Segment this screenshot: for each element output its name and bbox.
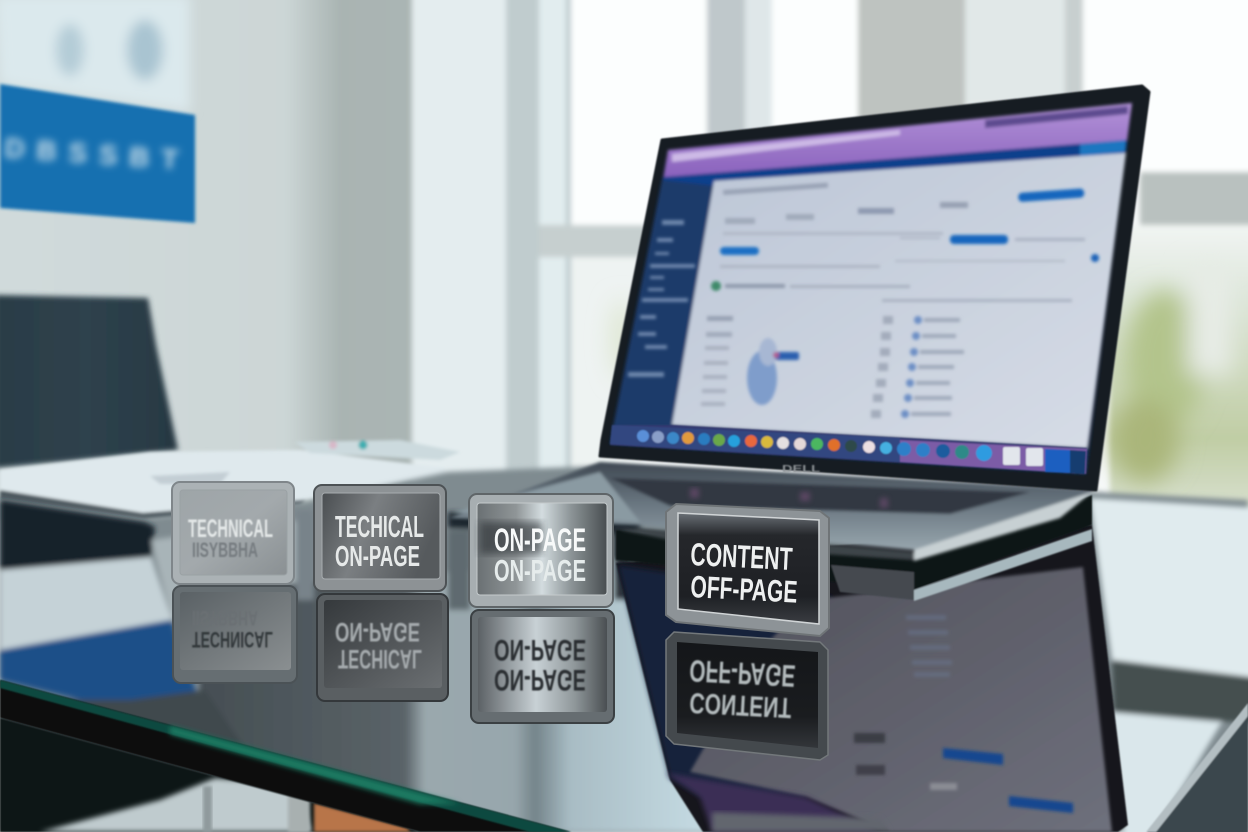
glass table	[0, 466, 1248, 832]
chart blob	[701, 316, 799, 406]
tile reflection: off-page: OFF-PAGE	[689, 653, 796, 694]
reflected blue pills	[854, 615, 1073, 813]
tile: technical: IISYBBHA	[192, 539, 258, 562]
laptop screen	[610, 103, 1132, 474]
tile: technical on-page	[314, 485, 446, 591]
tile: content off-page: CONTENT	[690, 536, 794, 577]
tile: content off-page: OFF-PAGE	[690, 569, 798, 610]
tile: technical	[172, 482, 294, 584]
laptop lid	[600, 86, 1149, 490]
keyboard colour reflections	[690, 488, 888, 508]
tile reflection: on-page double: ON-PAGE	[494, 633, 586, 666]
sidebar	[612, 180, 716, 432]
tile: technical on-page: TECHICAL	[335, 509, 424, 544]
tile reflection: on-page: ON-PAGE	[335, 617, 420, 647]
content pane	[672, 153, 1126, 448]
poster on wall: DBSSBT	[4, 132, 179, 175]
tile reflection: technical: TECHNICAL	[192, 627, 273, 652]
tile reflection: technical	[173, 586, 297, 683]
dark sheen behind first line	[480, 522, 542, 554]
office chair	[0, 295, 178, 468]
tile: on-page: ON-PAGE	[494, 553, 586, 588]
tile: on-page	[469, 494, 613, 607]
reflected base	[616, 495, 1092, 601]
tile reflection: on-page double	[471, 610, 614, 723]
tile: on-page: ON-PAGE	[494, 522, 586, 558]
corner frame	[1140, 703, 1248, 832]
tile reflection: off-page: CONTENT	[689, 686, 792, 723]
tile reflection: on-page	[317, 594, 448, 701]
laptop base	[449, 462, 1094, 561]
tile: technical: TECHNICAL	[188, 515, 273, 543]
dock	[610, 425, 1087, 474]
tile reflection: on-page double: ON-PAGE	[494, 663, 586, 696]
table base tone	[0, 466, 1248, 832]
poster on wall	[0, 0, 195, 223]
blue buttons	[1018, 188, 1084, 202]
laptop brand label: DELL	[782, 464, 820, 475]
papers on desk	[0, 440, 460, 520]
tile: content off-page	[666, 504, 829, 636]
tile reflection: on-page: TECHICAL	[338, 644, 422, 674]
sidebar labels	[628, 220, 695, 377]
tile reflection: off-page	[666, 632, 828, 760]
data rows	[871, 316, 964, 418]
screen content details	[711, 183, 1099, 302]
foliage outside the window	[612, 265, 1232, 482]
tile: technical on-page: ON-PAGE	[335, 541, 420, 573]
table front edge	[0, 680, 571, 832]
tile reflection: technical: IISYBBHA	[192, 606, 258, 629]
laptop	[449, 86, 1149, 561]
laptop reflection in table	[616, 495, 1128, 832]
